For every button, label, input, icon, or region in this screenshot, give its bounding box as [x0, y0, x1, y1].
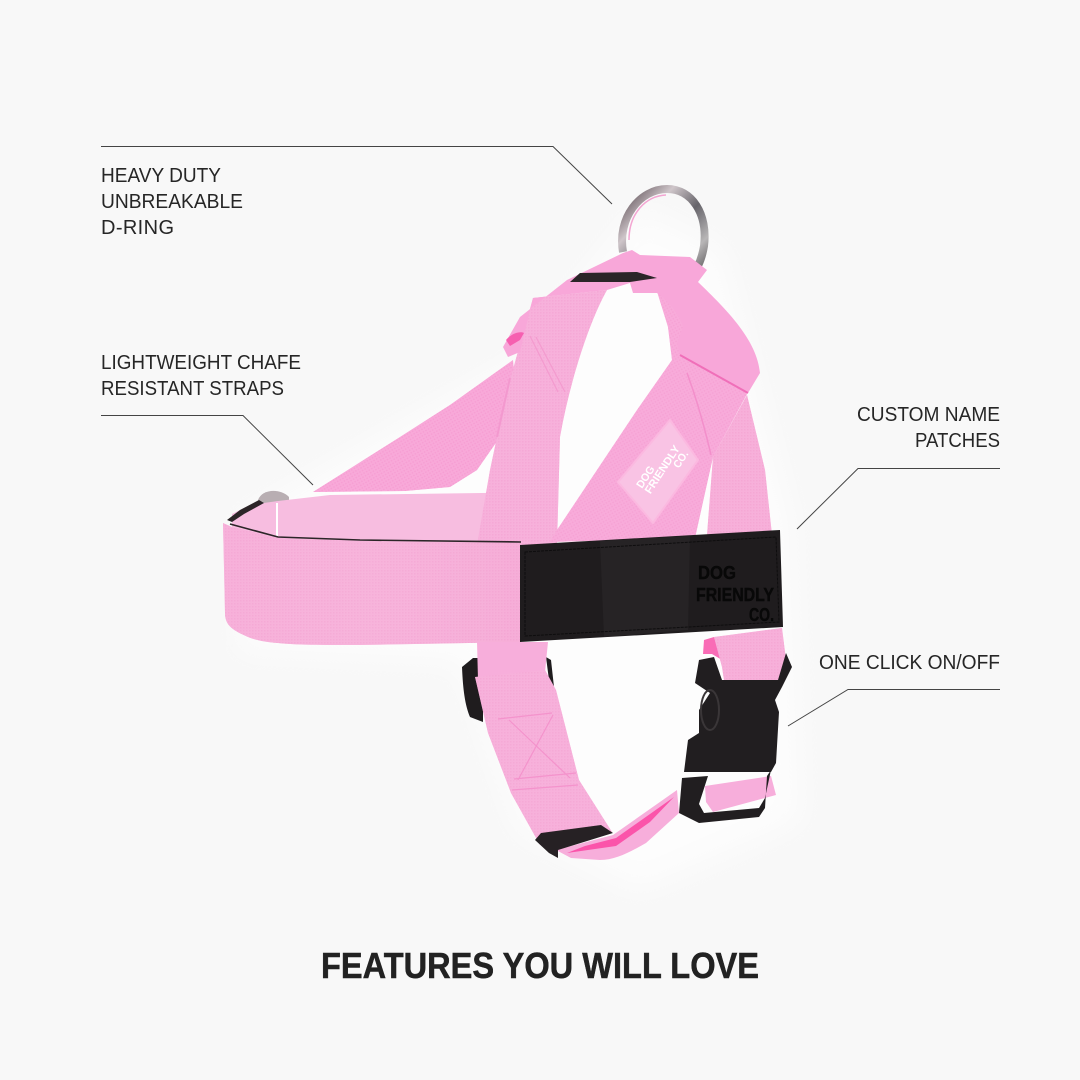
lower strap below slider: [475, 642, 612, 845]
callout text: CUSTOM NAME: [857, 404, 1000, 426]
callout text: ONE CLICK ON/OFF: [819, 652, 1000, 674]
black leather patch with logo: [520, 530, 783, 642]
custom rubber name patch: DOG: [634, 464, 658, 491]
icon: steel D-ring: [622, 189, 705, 274]
custom rubber name patch: FRIENDLY: [643, 443, 683, 496]
callout text: HEAVY DUTY: [101, 165, 221, 187]
strap loop through buckle: [705, 776, 776, 812]
black leather patch with logo: DOG: [698, 563, 736, 583]
callout text: RESISTANT STRAPS: [101, 378, 284, 400]
left side strap diagonal: [313, 360, 516, 492]
callout: D-ring: [101, 146, 612, 239]
title: FEATURES YOU WILL LOVE: [321, 945, 759, 986]
bottom strap with neon underside: [556, 790, 679, 860]
leader line: [101, 416, 313, 485]
right vertical strap upper: [707, 395, 772, 535]
black leather patch with logo: FRIENDLY: [696, 585, 774, 605]
small ring on rear band: [258, 491, 289, 505]
callout: straps: [101, 352, 313, 485]
harness product illustration: [223, 189, 792, 860]
wide front band: [223, 523, 521, 645]
callout text: PATCHES: [915, 430, 1000, 452]
leader line: [101, 146, 612, 204]
harness glow: [240, 210, 800, 890]
rear band inner: [227, 492, 555, 545]
callout text: UNBREAKABLE: [101, 191, 243, 213]
callout: buckle: [788, 652, 1000, 726]
right strap lower: [703, 628, 786, 680]
shoulder fold and knot: [503, 250, 760, 393]
side-release buckle: [679, 653, 792, 823]
callout text: LIGHTWEIGHT CHAFE: [101, 352, 301, 374]
left plastic slider: [462, 657, 554, 722]
custom rubber name patch: [618, 420, 698, 523]
black webbing keeper: [535, 825, 613, 858]
black leather patch with logo: CO.: [749, 605, 774, 625]
leader line: [797, 468, 1000, 529]
leader line: [788, 690, 1000, 726]
callout: name patches: [797, 404, 1000, 529]
callout text: D-RING: [101, 217, 174, 239]
custom rubber name patch: CO.: [671, 449, 691, 470]
diagonal chest strap: [550, 285, 747, 542]
left vertical strap: [477, 290, 607, 545]
